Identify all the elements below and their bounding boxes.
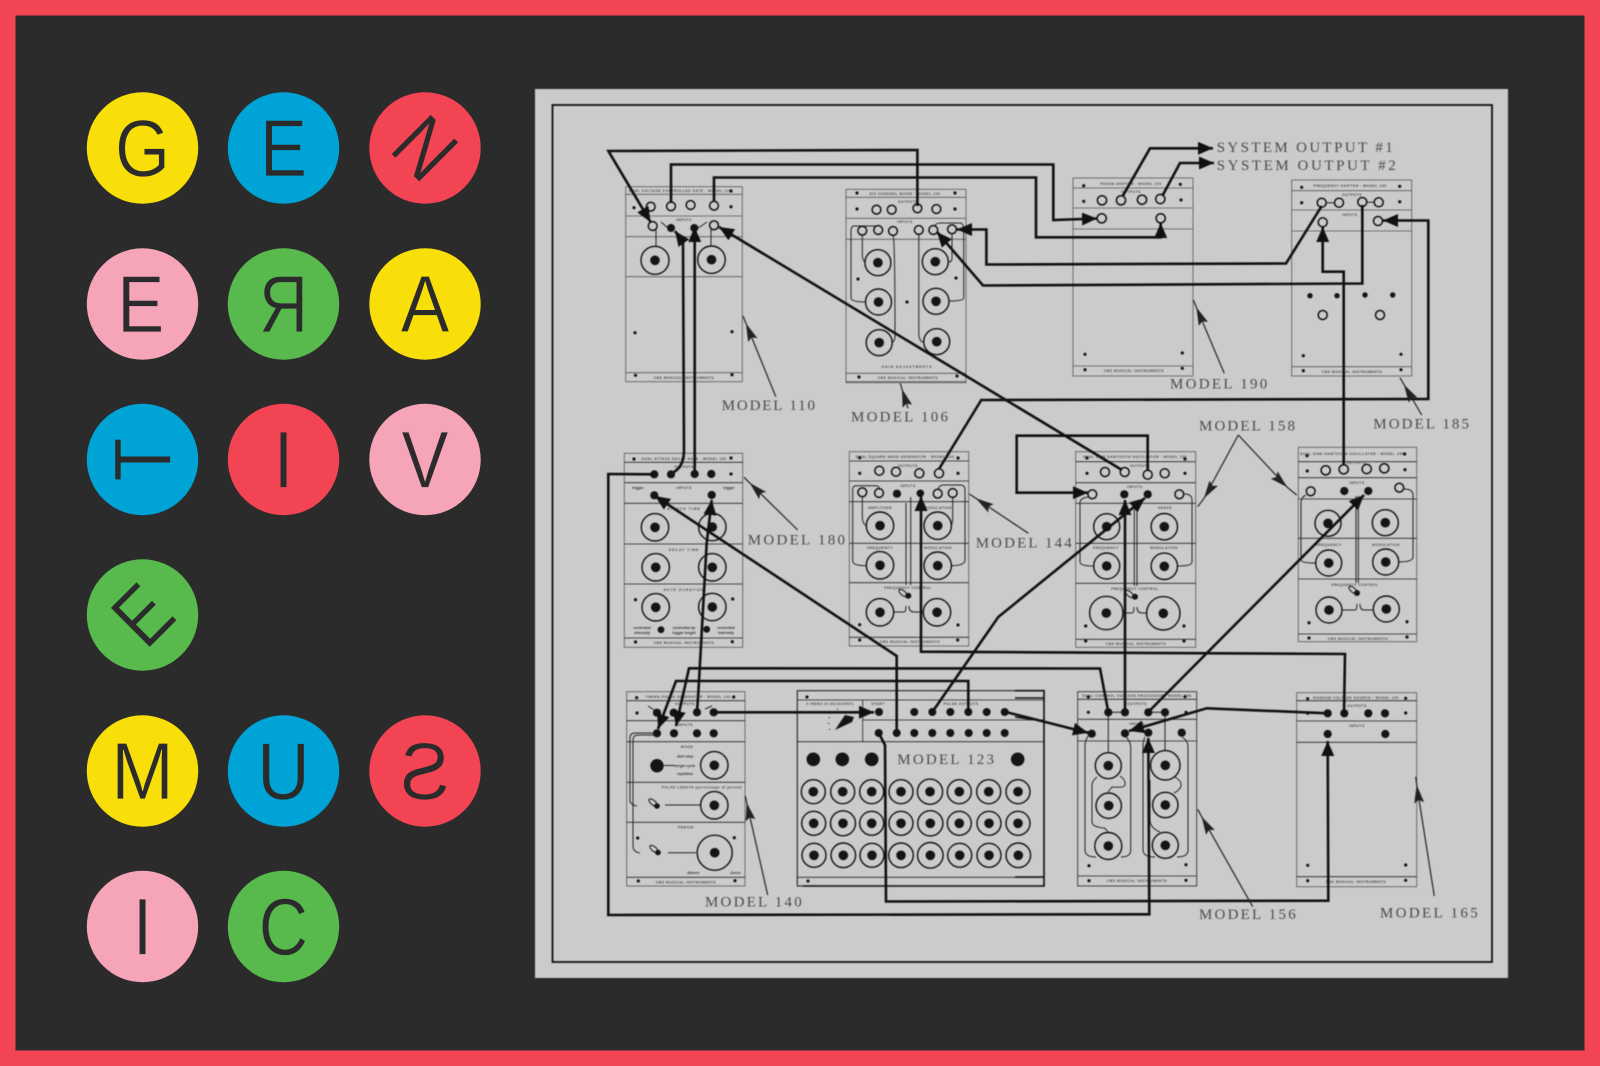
- module 123 sequencer: START: [871, 702, 885, 706]
- module 106: SIX CHANNEL MIXER · MODEL 106: [870, 192, 940, 196]
- letter T rotated: [87, 404, 198, 515]
- module 110: [626, 187, 742, 382]
- module 165: [1297, 693, 1417, 887]
- callout: model 106: MODEL 106: [851, 410, 948, 426]
- letter R mirrored: R: [259, 258, 308, 349]
- module 158 right: INPUTS: [1349, 481, 1365, 485]
- callout: model 144: MODEL 144: [976, 535, 1072, 551]
- module 180: INPUTS: [676, 486, 692, 490]
- module 185: [1292, 180, 1412, 376]
- module 190: [1073, 178, 1193, 376]
- module 140: CBS MUSICAL INSTRUMENTS: [656, 880, 716, 884]
- module 106: [846, 189, 966, 383]
- module 165: CBS MUSICAL INSTRUMENTS: [1326, 880, 1386, 884]
- callout: model 144: [969, 494, 1072, 551]
- module 185: CBS MUSICAL INSTRUMENTS: [1322, 370, 1382, 374]
- module 140: .2secs: [729, 871, 740, 875]
- module 106: INPUTS: [897, 220, 913, 224]
- letter A: [369, 248, 481, 360]
- module 190: OUTPUTS: [1121, 190, 1141, 194]
- patch diagram panel: [535, 89, 1508, 978]
- letter V: V: [401, 415, 449, 506]
- callout: model 165: [1380, 777, 1478, 921]
- module 158 right: FREQUENCY CONTROL: [1331, 583, 1379, 587]
- callout: model 156: [1198, 809, 1296, 923]
- letter I: I: [274, 415, 293, 506]
- module 106: OUTPUTS: [898, 200, 918, 204]
- letter T rotated: T: [98, 438, 189, 481]
- letter C: C: [259, 881, 308, 972]
- callout: model 190: [1170, 300, 1267, 392]
- letter S mirrored: S: [400, 727, 450, 817]
- module 156: [1078, 692, 1197, 886]
- module 156: CBS MUSICAL INSTRUMENTS: [1107, 879, 1167, 883]
- letter E: [228, 92, 339, 204]
- callout: model 158: [1198, 419, 1297, 507]
- module 144: AMPLITUDE: [868, 506, 892, 510]
- module 165: INPUTS: [1349, 724, 1365, 728]
- module 190: CBS MUSICAL INSTRUMENTS: [1104, 369, 1164, 373]
- module 106: CBS MUSICAL INSTRUMENTS: [878, 376, 938, 380]
- letter M: [87, 715, 198, 827]
- callout: model 110: MODEL 110: [722, 398, 815, 414]
- module 140: OUTPUTS: [675, 702, 695, 706]
- module 180: trigger: [723, 486, 735, 490]
- module 106: GAIN ADJUSTMENTS: [882, 365, 932, 369]
- letter E: E: [117, 259, 164, 350]
- callout: model 110: [722, 316, 815, 414]
- module 123 sequencer: PULSE OUTPUTS: [944, 702, 979, 706]
- letter M: M: [111, 725, 174, 817]
- label: model 123: MODEL 123: [897, 752, 994, 768]
- letter R mirrored: [228, 248, 339, 360]
- panel background: [535, 89, 1508, 978]
- module 144: DUAL SQUARE WAVE GENERATOR · MODEL 144: [856, 455, 954, 459]
- module 140: repetitive: [677, 772, 693, 776]
- callout: model 158: MODEL 158: [1199, 419, 1295, 435]
- patch cables: [608, 148, 1428, 915]
- module 180: controlled by: [673, 626, 696, 630]
- module 140: single cycle: [675, 764, 695, 768]
- module 185: INPUTS: [1342, 213, 1358, 217]
- module 123 sequencer: [797, 691, 1044, 886]
- callout: model 156: MODEL 156: [1199, 907, 1296, 923]
- module 158 left: INPUTS: [1127, 485, 1143, 489]
- letter U: U: [257, 726, 310, 817]
- module 123 sequencer: 4 INDEX (4 ADJACENT): [806, 702, 854, 706]
- module 180: internally: [634, 631, 651, 635]
- callout: model 185: [1373, 378, 1469, 432]
- module 140: TIMING PULSE GENERATOR · MODEL 140: [645, 695, 731, 699]
- callout: model 140: [705, 796, 802, 911]
- module 140: PULSE LENGTH (percentage of period): [662, 786, 742, 790]
- callout: model 165: MODEL 165: [1380, 905, 1478, 921]
- module 144: FREQUENCY CONTROL: [884, 586, 932, 590]
- callout: model 190: MODEL 190: [1170, 376, 1267, 392]
- letter G: [87, 92, 198, 204]
- callout: model 180: [744, 477, 845, 548]
- module 140: INPUTS: [677, 723, 693, 727]
- module 144: CBS MUSICAL INSTRUMENTS: [880, 640, 940, 644]
- letter E rotated: E: [94, 567, 192, 664]
- callout: model 106: [851, 383, 948, 426]
- module 180: [624, 453, 743, 647]
- module 158 left: MODULATION: [1150, 546, 1178, 550]
- letter I: I: [133, 882, 152, 973]
- letter A: A: [401, 259, 450, 350]
- letter E: E: [260, 103, 307, 194]
- module 185: OUTPUTS: [1342, 193, 1362, 197]
- module 185: FREQUENCY SHIFTER · MODEL 185: [1314, 184, 1386, 188]
- callout: model 185: MODEL 185: [1373, 416, 1469, 432]
- module 165: RANDOM VOLTAGE SOURCE · MODEL 165: [1313, 696, 1399, 700]
- module 180: internally: [718, 631, 735, 635]
- letter U: [228, 715, 339, 827]
- module 158 right: CBS MUSICAL INSTRUMENTS: [1328, 637, 1388, 641]
- module 110: DUAL VOLTAGE CONTROLLED GATE · MODEL 110: [629, 189, 731, 193]
- letter E rotated: [64, 536, 221, 694]
- module 180: controlled: [633, 626, 651, 630]
- module 144: [849, 452, 969, 646]
- module 140: [627, 692, 745, 886]
- letter N rotated: N: [374, 99, 474, 199]
- letter I: [228, 404, 339, 515]
- module 140: PERIOD: [678, 826, 694, 830]
- module 144: INPUTS: [900, 484, 916, 488]
- module 140: .08secs: [686, 871, 700, 875]
- module 180: controlled: [717, 626, 735, 630]
- module 144: FREQUENCY: [867, 546, 893, 550]
- module 156: DUAL CONTROL VOLTAGE PROCESSOR · MODEL 156: [1082, 694, 1192, 698]
- module 165: OUTPUTS: [1347, 704, 1367, 708]
- inner frame: [552, 105, 1492, 962]
- module 156: INPUTS: [1129, 722, 1145, 726]
- module 140: MODE: [681, 745, 693, 749]
- module 158 left: [1076, 452, 1196, 647]
- letter C: [228, 871, 339, 982]
- callout: model 140: MODEL 140: [705, 895, 802, 911]
- letter N rotated: [346, 69, 504, 227]
- module 158 left: FREQUENCY: [1093, 546, 1119, 550]
- module 180: trigger length: [672, 631, 696, 635]
- label: system output 2: SYSTEM OUTPUT #2: [1217, 158, 1396, 174]
- module 144: OUTPUTS: [898, 464, 918, 468]
- module 180: DUAL ATTACK DECAY GATE · MODEL 180: [642, 457, 726, 461]
- module 140: start stop: [677, 754, 694, 758]
- module 190: PHASE SHIFTER · MODEL 190: [1100, 182, 1162, 186]
- module 158 right: OUTPUTS: [1346, 461, 1366, 465]
- module 158 right: [1298, 447, 1417, 642]
- module 180: trigger: [632, 486, 644, 490]
- module 156: OUTPUTS: [1127, 702, 1147, 706]
- module 180: DECAY TIME: [669, 548, 699, 552]
- module 158 left: CBS MUSICAL INSTRUMENTS: [1106, 642, 1166, 646]
- module 110: INPUTS: [676, 218, 692, 222]
- module 144: MODULATION: [924, 506, 952, 510]
- letter E: [87, 248, 198, 360]
- letter G: G: [115, 103, 170, 194]
- module 180: CBS MUSICAL INSTRUMENTS: [654, 641, 714, 645]
- letter V: [369, 404, 481, 515]
- module 158 right: MODULATION: [1372, 543, 1400, 547]
- module 158 left: OUTPUTS: [1130, 464, 1150, 468]
- stage selector dial: [829, 709, 854, 733]
- module 158 left: SHAPE: [1158, 506, 1172, 510]
- module 144: MODULATION: [924, 546, 952, 550]
- label: system output 1: SYSTEM OUTPUT #1: [1217, 140, 1393, 156]
- module 158 right: FREQUENCY: [1316, 543, 1342, 547]
- module 110: CBS MUSICAL INSTRUMENTS: [654, 376, 714, 380]
- module 158 right: DUAL SINE-SAWTOOTH OSCILLATOR · MODEL 158: [1300, 452, 1404, 456]
- letter I: [87, 871, 198, 982]
- callout: model 180: MODEL 180: [748, 532, 845, 548]
- module 158 left: FREQUENCY CONTROL: [1111, 587, 1159, 591]
- module 180: ATTACK TIME: [666, 507, 701, 511]
- generative music letter grid: [64, 69, 504, 982]
- letter S mirrored: [369, 715, 481, 827]
- module 180: NOTE DURATION: [663, 588, 705, 592]
- module 158 left: DUAL SINE-SAWTOOTH OSCILLATOR · MODEL 158: [1083, 455, 1187, 459]
- module 180: OUTPUTS: [674, 465, 694, 469]
